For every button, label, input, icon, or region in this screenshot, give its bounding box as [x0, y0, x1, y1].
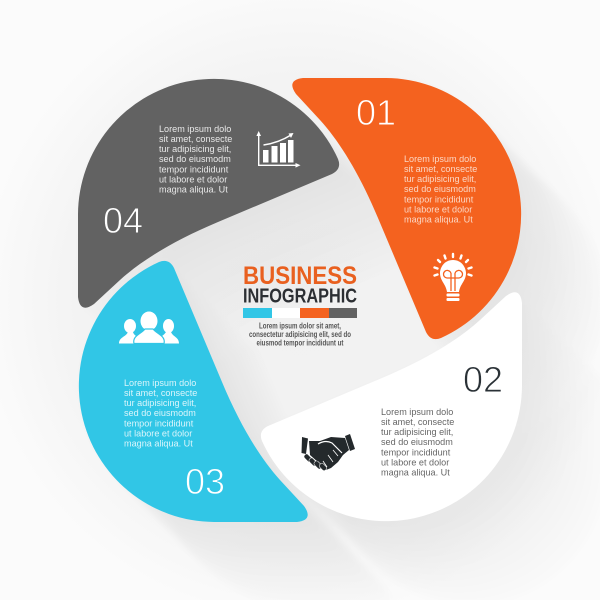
text block: magna aliqua. Ut	[404, 214, 473, 224]
text block: ut labore et dolor	[124, 428, 192, 438]
panel: step 04 gray	[78, 79, 339, 308]
text block: tempor incididunt	[404, 194, 474, 204]
text block: sed do eiusmodm	[404, 184, 476, 194]
text block: tur adipisicing elit,	[124, 398, 196, 408]
text block: Lorem ipsum dolo	[124, 378, 196, 388]
heading: business: BUSINESS	[243, 262, 357, 290]
text block: sit amet, consecte	[159, 134, 232, 144]
text block: sit amet, consecte	[404, 164, 477, 174]
text block: Lorem ipsum dolo	[404, 154, 476, 164]
icon: bar chart	[256, 131, 300, 168]
subtitle: Lorem ipsum dolor sit amet,	[259, 322, 341, 330]
text block: sed do eiusmodm	[159, 154, 231, 164]
blade: blue	[79, 261, 308, 522]
icon: handshake	[302, 434, 355, 472]
number 01: 01	[356, 92, 396, 133]
heading: infographic: INFOGRAPHIC	[243, 286, 357, 308]
subtitle: consectetur adipisicing elit, sed do	[249, 330, 351, 339]
number 04: 04	[103, 200, 143, 241]
text block: tempor incididunt	[381, 447, 451, 457]
blade: orange	[292, 78, 521, 339]
text block: sed do eiusmodm	[124, 408, 196, 418]
panel: step 01 orange	[292, 78, 521, 339]
blade: white	[261, 292, 522, 521]
center title block	[243, 262, 357, 348]
blade: gray	[78, 79, 339, 308]
icon: light bulb	[434, 254, 472, 301]
subtitle: eiusmod tempor incididunt ut	[256, 338, 344, 348]
icon: people	[119, 312, 179, 344]
panel: step 02 white	[261, 292, 522, 521]
number 03: 03	[185, 461, 225, 502]
text block: tur adipisicing elit,	[381, 427, 453, 437]
color bar	[243, 308, 357, 318]
text block: tempor incididunt	[124, 418, 194, 428]
panel: step 03 blue	[79, 261, 308, 522]
text block: magna aliqua. Ut	[159, 184, 228, 194]
text block: ut labore et dolor	[381, 457, 449, 467]
long shadows	[78, 78, 600, 600]
text block: Lorem ipsum dolo	[381, 407, 453, 417]
text block: ut labore et dolor	[404, 204, 472, 214]
text block: tur adipisicing elit,	[159, 144, 231, 154]
text block: sit amet, consecte	[381, 417, 454, 427]
text block: sed do eiusmodm	[381, 437, 453, 447]
number 02: 02	[463, 359, 503, 400]
text block: Lorem ipsum dolo	[159, 124, 231, 134]
text block: tempor incididunt	[159, 164, 229, 174]
text block: magna aliqua. Ut	[381, 468, 450, 478]
text block: magna aliqua. Ut	[124, 438, 193, 448]
text block: tur adipisicing elit,	[404, 174, 476, 184]
text block: ut labore et dolor	[159, 174, 227, 184]
text block: sit amet, consecte	[124, 388, 197, 398]
